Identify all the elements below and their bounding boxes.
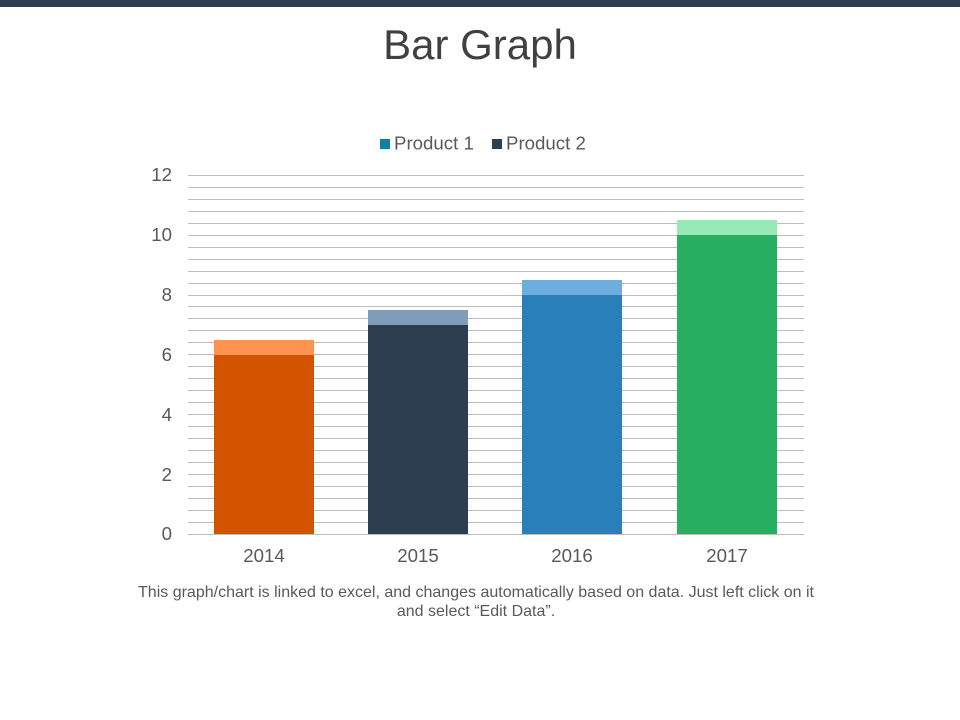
y axis labels: 8 <box>162 284 172 305</box>
bar: 2015 <box>368 310 468 534</box>
top bar <box>0 0 960 7</box>
caption: This graph/chart is linked to excel, and changes automatically based on data. Just left click on it <box>138 584 815 601</box>
legend: product 2: Product 2 <box>506 132 586 154</box>
bar: 2014 <box>214 340 314 534</box>
legend: product 1: Product 1 <box>394 132 474 154</box>
caption <box>138 584 815 620</box>
bar: 2017 <box>677 220 777 534</box>
y axis labels: 6 <box>162 344 172 365</box>
legend <box>380 132 586 154</box>
y axis labels <box>151 164 172 544</box>
x axis labels: 2015 <box>397 545 439 566</box>
y axis labels: 4 <box>162 404 172 425</box>
bar: 2016 <box>522 280 622 534</box>
y axis labels: 0 <box>162 523 172 544</box>
y axis labels: 2 <box>162 464 172 485</box>
x axis labels: 2016 <box>551 545 593 566</box>
x axis labels: 2017 <box>706 545 748 566</box>
y axis labels: 10 <box>151 224 172 245</box>
caption: and select “Edit Data”. <box>397 603 555 620</box>
title: Bar Graph <box>383 21 577 68</box>
x axis labels: 2014 <box>243 545 285 566</box>
x axis labels <box>243 545 748 566</box>
y axis labels: 12 <box>151 164 172 185</box>
bar chart <box>151 164 804 566</box>
